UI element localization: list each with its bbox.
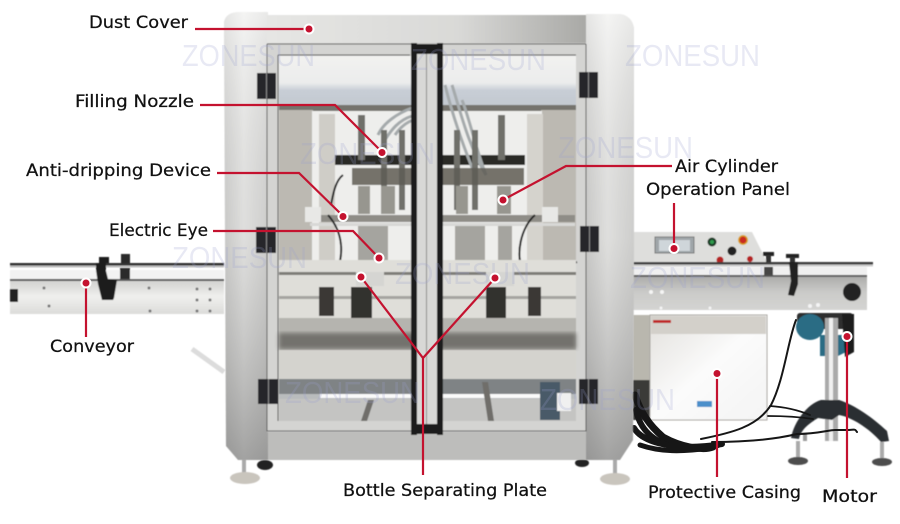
callout: Bottle Separating Plate: Bottle Separating Plate [343, 481, 547, 501]
plate band [279, 350, 576, 379]
callout: Electric Eye: Electric Eye [109, 221, 208, 241]
callout: Conveyor [50, 278, 134, 357]
window [278, 55, 576, 421]
callout: Operation Panel [646, 180, 790, 254]
right conveyor and operation panel [632, 232, 873, 310]
protective casing [633, 315, 767, 420]
watermarks: ZONESUN [182, 38, 315, 73]
watermarks: ZONESUN [625, 38, 760, 73]
bottom band [268, 432, 586, 460]
separating plates [356, 272, 384, 286]
watermarks [172, 38, 765, 417]
callout: Electric Eye [109, 221, 384, 264]
cross bar [305, 215, 575, 222]
shadow band [279, 318, 576, 350]
centre post [411, 43, 442, 435]
motor and stand [788, 313, 892, 466]
watermarks: ZONESUN [395, 256, 530, 291]
watermarks: ZONESUN [558, 130, 693, 165]
left column [224, 12, 268, 460]
callout: Filling Nozzle [75, 92, 388, 158]
machine feet [230, 459, 630, 485]
callout: Anti-dripping Device [26, 161, 348, 222]
callout: Motor: Motor [822, 487, 877, 507]
main cabinet [224, 12, 634, 460]
watermarks: ZONESUN [285, 375, 420, 410]
hopper area [279, 56, 576, 105]
watermarks: ZONESUN [540, 382, 675, 417]
callout: Protective Casing [648, 368, 801, 503]
left conveyor [10, 254, 224, 372]
callout: Dust Cover [89, 13, 314, 34]
watermarks: ZONESUN [411, 42, 546, 77]
hinges [256, 72, 599, 404]
callout: Air Cylinder: Air Cylinder [675, 157, 778, 177]
bottom window [279, 379, 576, 421]
cables [634, 320, 857, 451]
nozzles [358, 115, 505, 210]
lower interior [279, 260, 576, 320]
callout: Anti-dripping Device: Anti-dripping Device [26, 161, 211, 181]
callout: Motor [822, 331, 877, 507]
callout: Bottle Separating Plate [343, 272, 547, 501]
callout: Dust Cover: Dust Cover [89, 13, 188, 33]
nozzle bar [335, 155, 525, 165]
dust cover top bar [267, 15, 586, 43]
tubes [378, 85, 486, 175]
watermarks: ZONESUN [300, 136, 435, 171]
callout: Protective Casing: Protective Casing [648, 483, 801, 503]
right column [586, 14, 634, 460]
callout: Air Cylinder [498, 157, 778, 206]
door frame [267, 43, 586, 432]
operation panel box [633, 232, 767, 262]
callout: Conveyor: Conveyor [50, 337, 134, 357]
callout: Filling Nozzle: Filling Nozzle [75, 92, 194, 112]
watermarks: ZONESUN [172, 240, 307, 275]
callout: Operation Panel: Operation Panel [646, 180, 790, 200]
watermarks: ZONESUN [630, 260, 765, 295]
